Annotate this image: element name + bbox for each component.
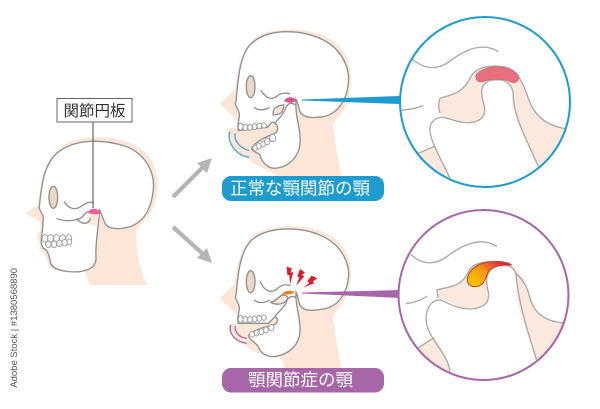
pain bolts bbox=[287, 267, 317, 288]
arrow: up to normal jaw bbox=[172, 158, 212, 198]
disc bbox=[476, 67, 519, 83]
label: TMD jaw: 顎関節症の顎 bbox=[248, 370, 353, 390]
top head: normal jaw open bbox=[220, 29, 351, 177]
displaced disc bbox=[467, 261, 512, 287]
teeth bbox=[42, 235, 72, 248]
motion arcs bbox=[230, 325, 247, 343]
bottom head: TMD jaw bbox=[220, 226, 351, 372]
motion arcs bbox=[229, 132, 249, 157]
teeth bbox=[238, 123, 276, 151]
pointer: bottom to zoom circle bbox=[302, 290, 400, 298]
side stock number: Adobe Stock | #1380568890 bbox=[9, 268, 20, 388]
label: TMD jaw bbox=[222, 368, 384, 392]
teeth bbox=[238, 315, 274, 337]
arrow: down to TMD jaw bbox=[172, 226, 212, 263]
pointer: top to zoom circle bbox=[302, 96, 400, 104]
zoom circle: TMD joint bbox=[398, 210, 568, 380]
label: normal jaw bbox=[222, 176, 384, 201]
zoom circle: normal joint bbox=[397, 17, 570, 187]
left head: overview with articular disc bbox=[25, 137, 158, 285]
label: articular disc with leader line: 関節円板 bbox=[63, 102, 126, 120]
label: articular disc with leader line bbox=[57, 98, 132, 208]
label: normal jaw: 正常な顎関節の顎 bbox=[230, 178, 370, 198]
